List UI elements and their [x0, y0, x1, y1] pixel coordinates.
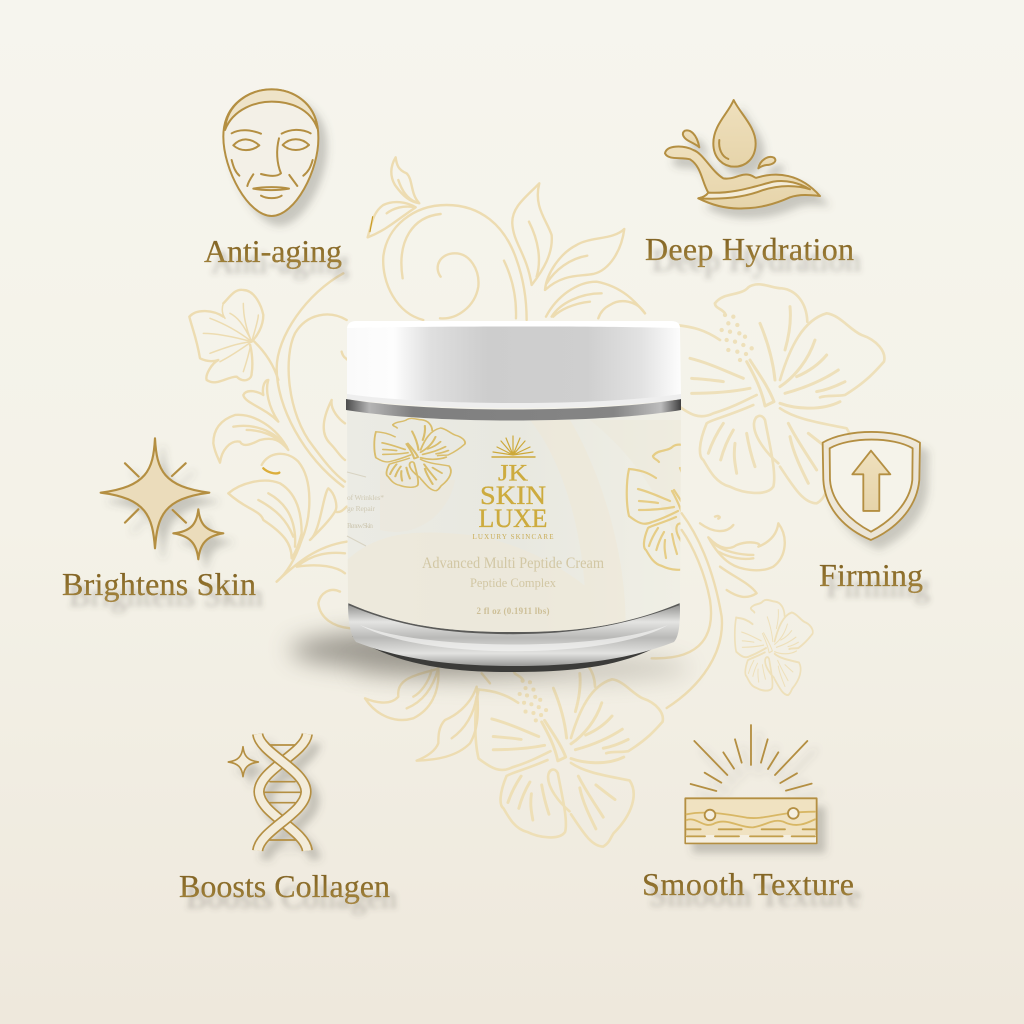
side text block: of Wrinkles*: [347, 493, 384, 502]
jar label panel: [346, 410, 681, 632]
label swooshes: [350, 552, 626, 632]
side text block: [347, 472, 384, 546]
icon: DNA helix with star: [228, 734, 307, 851]
logo wordmark: [472, 460, 554, 541]
logo wordmark: SKIN: [480, 481, 546, 510]
glass highlight: [360, 625, 668, 651]
side text block: ge Repair: [347, 504, 376, 513]
net weight: 2 fl oz (0.1911 lbs): [476, 606, 550, 616]
side text block: Renew Skin: [347, 521, 373, 530]
feature: Smooth Texture: [642, 725, 854, 902]
label: Anti-aging: Anti-aging: [204, 233, 342, 269]
logo wordmark: JK: [498, 460, 528, 486]
label: Boosts Collagen: Boosts Collagen: [179, 868, 390, 904]
product name: Advanced Multi Peptide Cream: [422, 555, 604, 572]
label: Brightens Skin: Brightens Skin: [62, 566, 256, 602]
neck band: [346, 399, 681, 420]
white lid: [347, 321, 681, 408]
feature: Deep Hydration: [645, 100, 854, 267]
jar lower rim shadow: [352, 636, 674, 672]
icon: face mask: [223, 89, 318, 216]
lid top highlight: [347, 321, 680, 328]
product subtitle: Peptide Complex: [470, 576, 557, 590]
flower: large hibiscus bottom centre: [475, 654, 663, 847]
lid bottom edge: [347, 394, 681, 408]
floral background illustration: [189, 157, 884, 847]
glass inner dark line: [349, 604, 679, 633]
jar ground shadow: [290, 630, 570, 670]
logo wordmark: LUXE: [478, 504, 548, 533]
flower: small hibiscus right: [735, 600, 813, 695]
scroll: right stems and leaves: [652, 513, 785, 708]
label: Smooth Texture: Smooth Texture: [642, 866, 854, 902]
label flower right edge: [626, 444, 681, 571]
jar soft under shadow: [350, 654, 690, 682]
feature: Boosts Collagen: [179, 734, 390, 904]
label flower top left: [374, 418, 465, 491]
label: Deep Hydration: Deep Hydration: [645, 231, 854, 267]
scroll: left stems, small flower and leaves: [189, 273, 350, 628]
label: Firming: Firming: [819, 557, 923, 593]
scroll: lower left leaves: [365, 668, 490, 761]
flower: large hibiscus top right: [671, 284, 884, 503]
logo wordmark: LUXURY SKINCARE: [472, 533, 554, 541]
icon: sparkles: [101, 438, 223, 559]
feature: Brightens Skin: [62, 438, 256, 602]
feature: Firming: [819, 432, 923, 593]
feature: Anti-aging: [204, 89, 342, 269]
icon: shield with arrow: [823, 432, 920, 540]
logo sunburst: [492, 436, 535, 457]
jar product: [283, 321, 684, 693]
icon: water drop and wave: [665, 100, 820, 208]
scroll: central swirl and upper leaves: [368, 157, 645, 320]
glass base: [348, 603, 680, 666]
icon: sun rays over skin layers: [685, 725, 817, 843]
